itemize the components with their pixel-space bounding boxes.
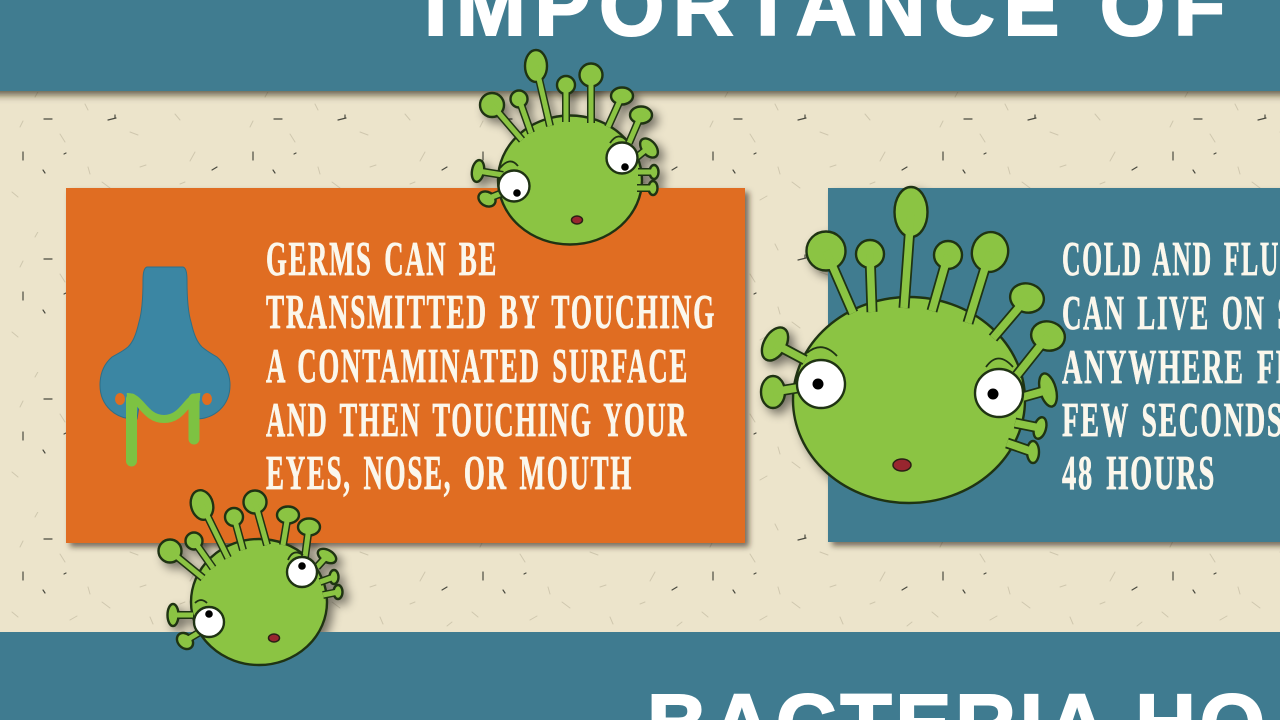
panel text: EYES, NOSE, OR MOUTH: [266, 445, 633, 500]
panel text: A CONTAMINATED SURFACE: [266, 338, 689, 393]
panel text: AND THEN TOUCHING YOUR: [266, 392, 688, 447]
panel text: TRANSMITTED BY TOUCHING: [266, 284, 716, 339]
top banner: [0, 0, 1280, 91]
panel text: GERMS CAN BE: [266, 231, 498, 286]
icon: runny nose: [100, 267, 230, 461]
panel: transmission (orange): [66, 188, 745, 543]
germ: lower: [158, 488, 342, 665]
germ: top: [470, 50, 661, 244]
germ: large: [756, 187, 1068, 503]
panel text: [266, 231, 716, 500]
bottom banner: [0, 632, 1280, 720]
panel text: [1062, 231, 1280, 500]
panel: survival time (teal): [828, 188, 1280, 542]
germ cast shadows: [158, 50, 1068, 665]
